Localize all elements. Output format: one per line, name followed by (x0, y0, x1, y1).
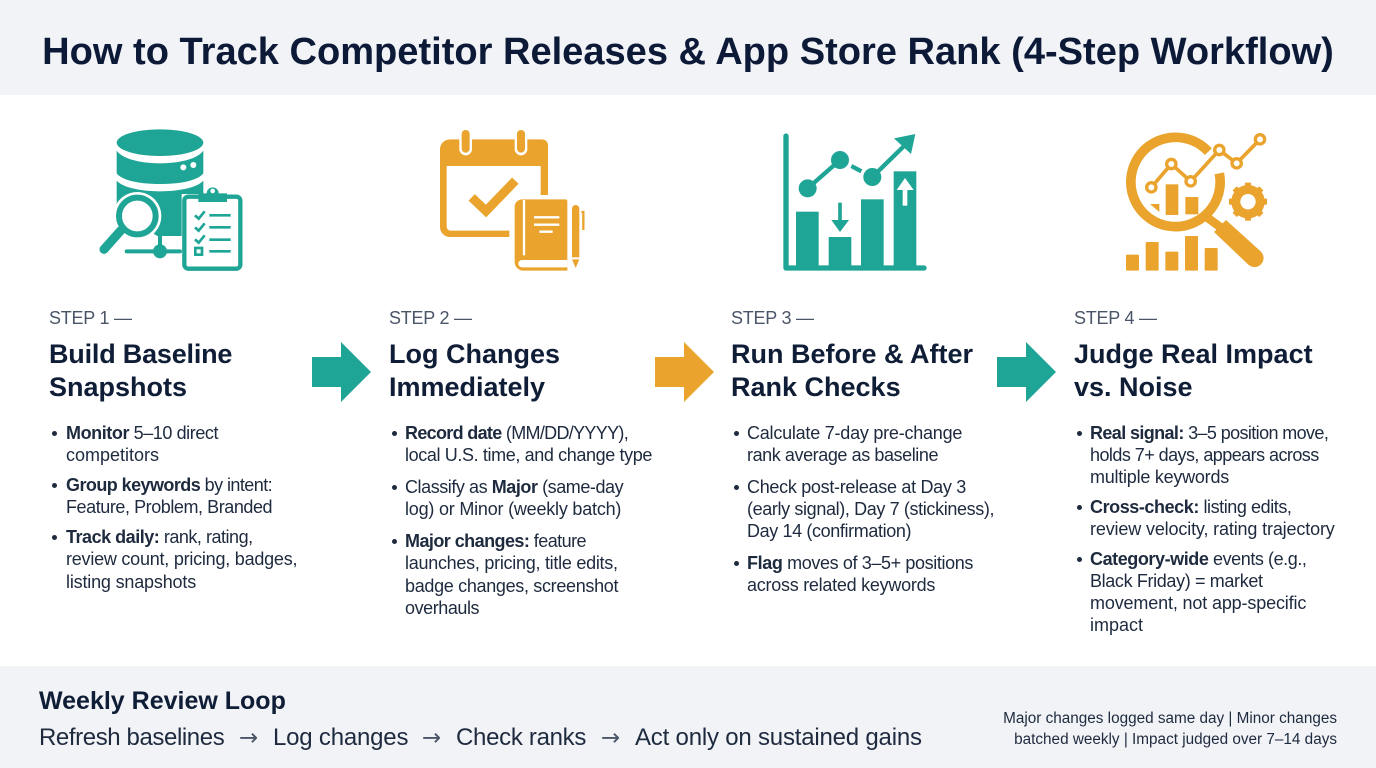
icon: database, magnifier and clipboard (100, 129, 242, 271)
bullet list: Check post-release at Day 3 (747, 477, 966, 497)
footer workflow line: → (601, 725, 620, 751)
footer workflow line: Check ranks (456, 724, 586, 751)
step label: STEP 2 — (389, 308, 472, 328)
footer note: batched weekly | Impact judged over 7–14 days (1014, 730, 1337, 748)
bullet list: launches, pricing, title edits, (405, 553, 618, 573)
bullet list: overhauls (405, 598, 479, 618)
panel: step 1 (49, 129, 297, 592)
panel: step 4 (1074, 132, 1335, 635)
heading: Build Baseline (49, 339, 232, 369)
bullet list: impact (1090, 615, 1143, 635)
bullet list: Track daily: rank, rating, (66, 527, 253, 547)
bullet list: Classify as Major (same-day (405, 477, 623, 497)
bullet list (734, 423, 994, 595)
bullet list: Day 14 (confirmation) (747, 521, 911, 541)
heading: Immediately (389, 372, 545, 402)
bullet list: holds 7+ days, appears across (1090, 445, 1319, 465)
bullet list: Calculate 7-day pre-change (747, 423, 962, 443)
bullet list: Major changes: feature (405, 531, 586, 551)
bullet list: across related keywords (747, 575, 935, 595)
footer workflow line: Refresh baselines (39, 724, 224, 751)
footer: weekly review loop (39, 687, 922, 751)
footer workflow line: → (422, 725, 441, 751)
arrow: step 3 to step 4 (997, 342, 1056, 402)
footer heading: Weekly Review Loop (39, 687, 286, 715)
footer band (0, 666, 1376, 768)
heading: Run Before & After (731, 339, 973, 369)
bullet list (1077, 423, 1335, 635)
title: How to Track Competitor Releases & App Store Rank (4-Step Workflow) (42, 31, 1334, 73)
bullet list: review count, pricing, badges, (66, 549, 297, 569)
heading: Snapshots (49, 372, 187, 402)
bullet list: Black Friday) = market (1090, 571, 1263, 591)
arrow: step 2 to step 3 (655, 342, 714, 402)
icon: magnifier over charts with gear (1126, 132, 1267, 271)
panel: step 3 (731, 133, 994, 595)
heading (1074, 339, 1313, 402)
bullet list: Group keywords by intent: (66, 475, 272, 495)
header band (0, 0, 1376, 95)
bullet list: local U.S. time, and change type (405, 445, 652, 465)
step label: STEP 3 — (731, 308, 814, 328)
bullet list: Real signal: 3–5 position move, (1090, 423, 1328, 443)
footer note: Major changes logged same day | Minor changes (1003, 710, 1337, 727)
bullet list: Feature, Problem, Branded (66, 497, 272, 517)
heading: Rank Checks (731, 372, 901, 402)
bullet list: (early signal), Day 7 (stickiness), (747, 499, 994, 519)
heading (49, 339, 232, 402)
bullet list: multiple keywords (1090, 467, 1229, 487)
bullet list: Flag moves of 3–5+ positions (747, 553, 973, 573)
footer note (1003, 710, 1337, 748)
step label: STEP 4 — (1074, 308, 1157, 328)
bullet list: Cross-check: listing edits, (1090, 497, 1292, 517)
icon: rank chart with arrows (783, 133, 927, 271)
heading: Judge Real Impact (1074, 339, 1313, 369)
bullet list: listing snapshots (66, 572, 196, 592)
bullet list: Category-wide events (e.g., (1090, 549, 1306, 569)
heading (389, 339, 560, 402)
step label: STEP 1 — (49, 308, 132, 328)
panel: step 2 (389, 130, 652, 618)
bullet list: movement, not app-specific (1090, 593, 1306, 613)
heading: vs. Noise (1074, 372, 1193, 402)
bullet list: badge changes, screenshot (405, 576, 618, 596)
bullet list: rank average as baseline (747, 445, 938, 465)
heading (731, 339, 973, 402)
bullet list (392, 423, 652, 618)
bullet list: Monitor 5–10 direct (66, 423, 218, 443)
footer workflow line: → (239, 725, 258, 751)
bullet list: review velocity, rating trajectory (1090, 519, 1335, 539)
footer workflow line: Log changes (273, 724, 408, 751)
footer workflow line: Act only on sustained gains (635, 724, 922, 751)
bullet list (52, 423, 297, 592)
arrow: step 1 to step 2 (312, 342, 371, 402)
footer workflow line (39, 724, 922, 751)
heading: Log Changes (389, 339, 560, 369)
bullet list: competitors (66, 445, 159, 465)
icon: calendar, notebook and pen (440, 130, 584, 271)
bullet list: log) or Minor (weekly batch) (405, 499, 621, 519)
bullet list: Record date (MM/DD/YYYY), (405, 423, 628, 443)
